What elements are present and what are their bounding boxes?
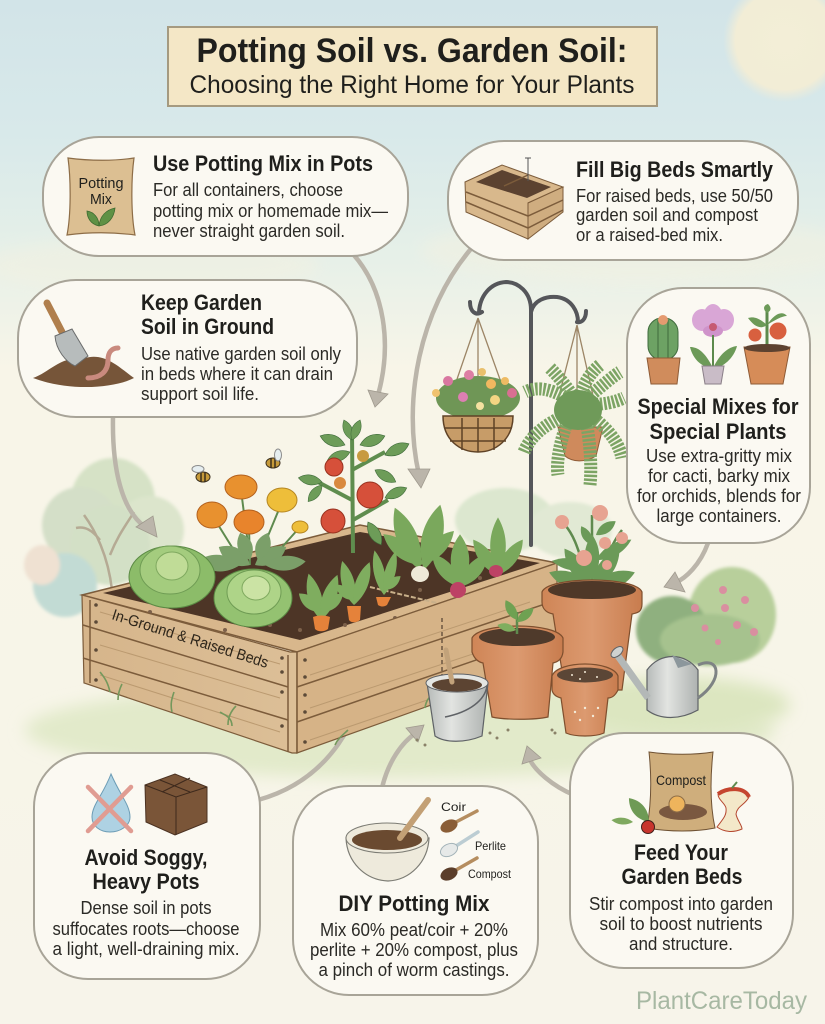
leafy greens and radishes [378,502,528,598]
panel: DIY potting mix: DIY Potting Mix [338,891,490,916]
panel: feed garden beds: and structure. [629,934,733,954]
icon: potting mix bag: Potting [78,175,124,192]
arrows [113,250,708,800]
panel: keep garden soil: Soil in Ground [141,314,274,339]
background trees and shrubs [24,458,776,666]
panel: special mixes: for orchids, blends for [637,486,801,506]
panel: feed garden beds [570,733,793,968]
subtitle: Choosing the Right Home for Your Plants [190,71,634,99]
panel: use potting mix: never straight garden soil. [153,221,345,241]
panel: keep garden soil: Keep Garden [141,290,262,315]
panel: special mixes: Use extra-gritty mix [646,446,792,466]
panel: keep garden soil [18,280,357,417]
raised garden bed [82,525,557,753]
panel: special mixes [627,288,810,543]
panel: feed garden beds: Feed Your [634,840,728,865]
hanging pole and hooks [470,282,586,545]
panel: avoid soggy pots: a light, well-draining mix. [52,939,240,959]
panel: DIY potting mix: a pinch of worm castings. [318,960,510,980]
icon: mixing bowl [346,800,429,881]
carrot seedlings [295,549,403,631]
panel: special mixes: Special Mixes for [638,394,799,419]
panel: special mixes: for cacti, barky mix [648,466,790,486]
bed label: In-Ground & Raised Beds [110,607,271,672]
panel: avoid soggy pots: Dense soil in pots [80,898,212,918]
panel: use potting mix: Use Potting Mix in Pots [153,151,373,176]
panel: DIY potting mix: Mix 60% peat/coir + 20% [320,920,508,940]
panel: keep garden soil: support soil life. [141,384,259,404]
hanging basket with flowers [432,318,520,452]
panel: feed garden beds: soil to boost nutrients [600,914,762,934]
panel: fill big beds: garden soil and compost [576,205,758,225]
bees [192,449,282,482]
panel: DIY potting mix: Perlite [475,839,506,853]
icon: potting mix bag: Mix [90,191,112,208]
panel: use potting mix: For all containers, choose [153,180,343,200]
title: Potting Soil vs. Garden Soil: [196,32,628,70]
terracotta pots [472,580,642,736]
icon: apple core [717,782,749,831]
icon: tomato pot [744,304,790,384]
panel: use potting mix: potting mix or homemade mix— [153,201,388,221]
title banner [168,27,657,106]
panel: use potting mix [43,137,408,256]
icon: potting mix bag [67,158,135,235]
panel: feed garden beds: Garden Beds [622,864,742,889]
icon: compost bag [647,752,715,831]
panel: avoid soggy pots [34,753,260,979]
panel: DIY potting mix: Coir [441,800,466,814]
panel: DIY potting mix: perlite + 20% compost, plus [310,940,518,960]
icon: crossed water drop [88,774,131,832]
panel: avoid soggy pots: suffocates roots—choose [52,919,240,939]
panel: feed garden beds: Stir compost into garden [589,894,773,914]
hanging fern [524,325,624,485]
watering can [609,644,716,718]
watermark: PlantCareToday [636,987,807,1015]
icon: trowel and worm [33,303,134,387]
lettuce heads [129,546,292,627]
icon: soil cube [145,774,207,835]
panel: fill big beds [448,141,798,260]
icon: compost bag: Compost [656,772,706,788]
flowering plant in large pot [546,505,638,595]
panel: avoid soggy pots: Avoid Soggy, [84,845,208,870]
panel: keep garden soil: in beds where it can drain [141,364,333,384]
icon: cactus pot [647,315,680,384]
panel: DIY potting mix: Compost [468,867,512,881]
panel: DIY potting mix [293,786,538,995]
panel: keep garden soil: Use native garden soil only [141,344,341,364]
panel: fill big beds: Fill Big Beds Smartly [576,157,774,182]
marigolds [196,475,308,573]
panel: special mixes: Special Plants [650,419,786,444]
icon: raised bed box [465,158,563,239]
icon: scoops [438,811,478,883]
panel: special mixes: large containers. [656,506,782,526]
panel: avoid soggy pots: Heavy Pots [92,869,200,894]
panel: fill big beds: For raised beds, use 50/50 [576,186,773,206]
icon: leaves and ladybug [611,794,654,834]
panel: fill big beds: or a raised-bed mix. [576,225,723,245]
icon: orchid [690,304,737,384]
tomato plant [298,418,411,553]
metal bucket [426,650,488,741]
seed dots on ground [416,728,556,746]
